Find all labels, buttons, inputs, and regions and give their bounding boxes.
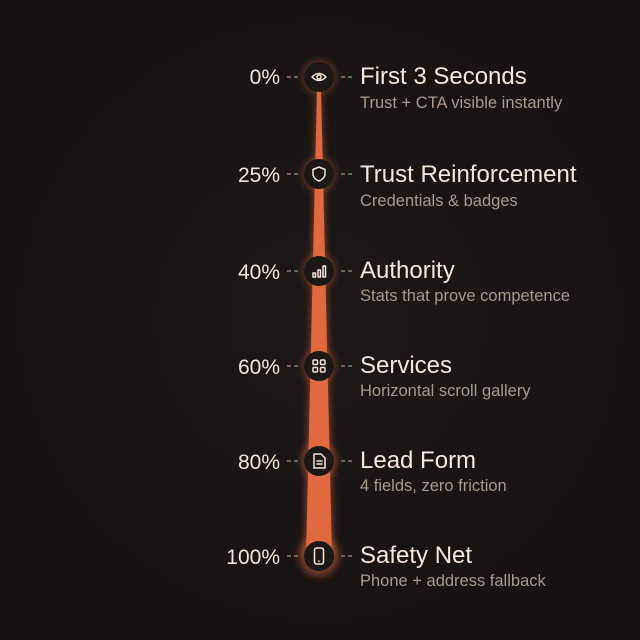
stage 25%: Trust Reinforcement [360, 161, 577, 188]
stage 60%: 60% [238, 356, 280, 379]
stage 0%: Trust + CTA visible instantly [360, 94, 563, 112]
stage 80%: Lead Form [360, 447, 476, 474]
stage 0% [250, 60, 563, 112]
stage 60%: Services [360, 352, 452, 379]
stage 100% [226, 536, 546, 590]
stage 80%: 4 fields, zero friction [360, 477, 507, 495]
stage 80%: 80% [238, 451, 280, 474]
stage 0%: 0% [250, 66, 280, 89]
stage 25% [238, 157, 577, 210]
stage 40% [238, 254, 570, 305]
stage 100%: 100% [226, 546, 280, 569]
icon: grid [313, 360, 325, 372]
stage 100%: Safety Net [360, 542, 472, 569]
stage 60%: Horizontal scroll gallery [360, 382, 531, 400]
icon: phone [314, 548, 324, 564]
funnel line [305, 90, 333, 556]
icon: document [314, 454, 325, 468]
stage 40%: 40% [238, 261, 280, 284]
icon: bars [313, 266, 326, 277]
stage 40%: Stats that prove competence [360, 287, 570, 305]
stage 25%: 25% [238, 164, 280, 187]
stage 100%: Phone + address fallback [360, 572, 546, 590]
stage 0%: First 3 Seconds [360, 63, 527, 90]
stage 40%: Authority [360, 257, 455, 284]
icon: eye [312, 74, 326, 80]
stage 25%: Credentials & badges [360, 192, 518, 210]
icon: shield [313, 167, 325, 181]
stage 60% [238, 349, 531, 400]
stage 80% [238, 443, 507, 495]
